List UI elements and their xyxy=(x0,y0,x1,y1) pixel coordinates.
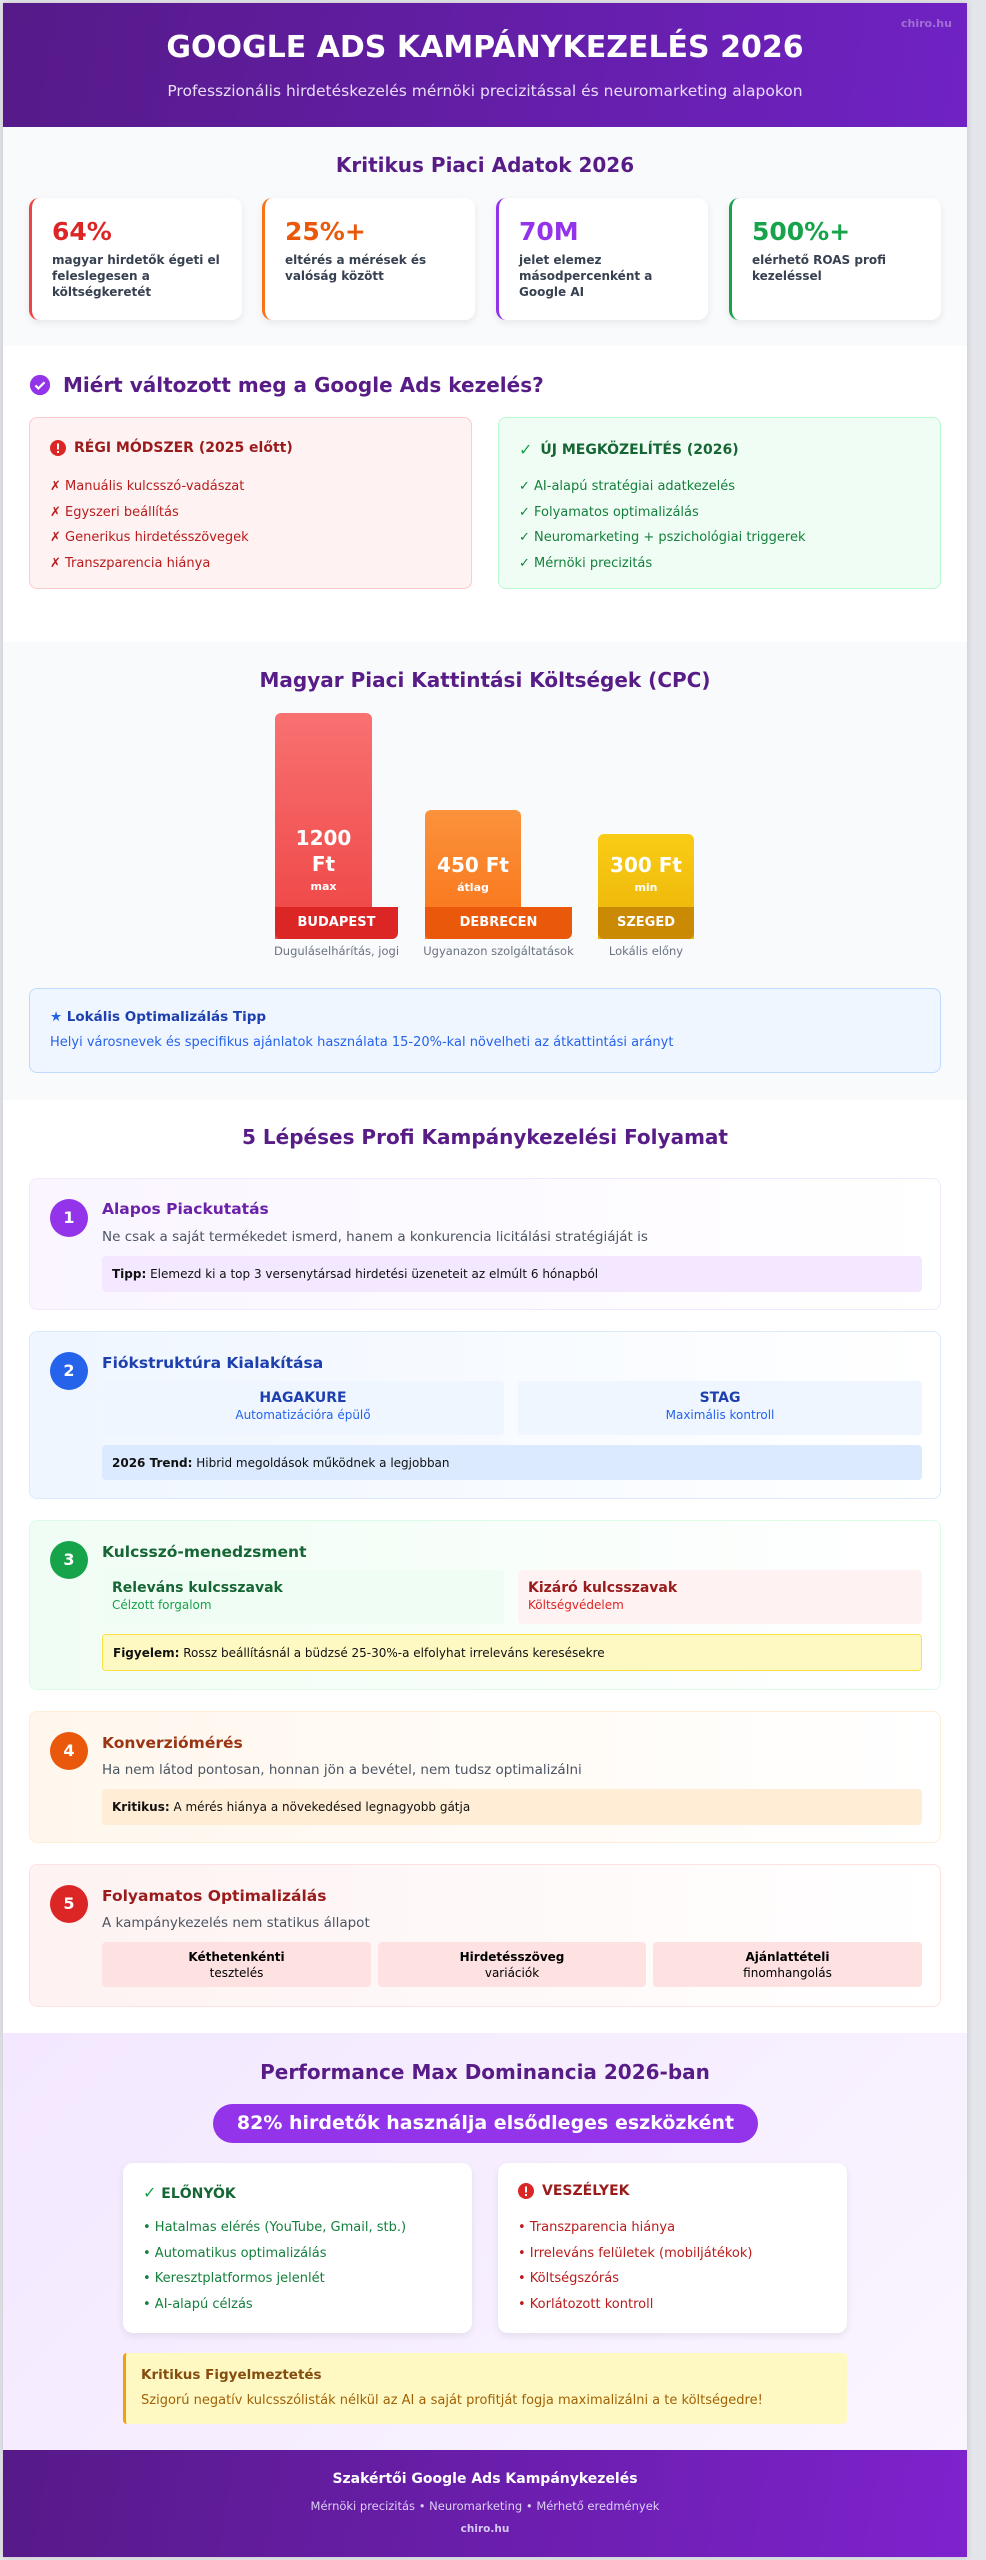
step 1: Elemezd ki a top 3 versenytársad hirdetési üzeneteit az elmúlt 6 hónapból xyxy=(150,1267,598,1281)
step 3: Célzott forgalom xyxy=(112,1598,212,1612)
bar: Debrecen xyxy=(425,810,521,939)
bar: Budapest xyxy=(275,713,372,939)
pill xyxy=(213,2104,758,2143)
step 1 xyxy=(29,1178,941,1310)
stat card 4: 500%+ xyxy=(752,217,850,246)
card: advantages: • AI-alapú célzás xyxy=(143,2297,253,2312)
step 3: Rossz beállításnál a büdzsé 25-30%-a elfolyhat irreleváns keresésekre xyxy=(183,1646,605,1660)
bar chart xyxy=(274,713,694,958)
step 3: Figyelem: xyxy=(113,1646,179,1660)
heading: Magyar Piaci Kattintási Költségek (CPC) xyxy=(260,668,710,692)
icon: check badge xyxy=(30,374,50,396)
footer xyxy=(3,2450,967,2557)
step 5: 5 xyxy=(63,1894,75,1913)
step 2: Automatizációra épülő xyxy=(235,1408,371,1422)
panel: old method xyxy=(29,417,472,589)
step 4: Ha nem látod pontosan, honnan jön a bevétel, nem tudsz optimalizálni xyxy=(102,1762,582,1778)
step 4: Kritikus: xyxy=(112,1800,170,1814)
bar chart: min xyxy=(634,881,658,894)
bar: Szeged xyxy=(598,834,694,939)
callout: local tip xyxy=(29,988,941,1073)
step 2: Fiókstruktúra Kialakítása xyxy=(102,1354,323,1372)
panel: new approach: ✓ AI-alapú stratégiai adatkezelés xyxy=(519,479,735,494)
bar chart: Ugyanazon szolgáltatások xyxy=(423,944,574,958)
card: dangers: • Korlátozott kontroll xyxy=(518,2297,653,2312)
panel: new approach: ✓ xyxy=(519,440,532,459)
panel: new approach: ✓ Mérnöki precizitás xyxy=(519,556,652,571)
panel: old method: ✗ Generikus hirdetésszövegek xyxy=(50,530,249,545)
panel: old method: ✗ Manuális kulcsszó-vadászat xyxy=(50,479,244,494)
title: GOOGLE ADS KAMPÁNYKEZELÉS 2026 xyxy=(166,30,804,65)
callout: critical warning: Szigorú negatív kulcsszólisták nélkül az AI a saját profitját fogja maximalizálni a te költségedre! xyxy=(141,2393,763,2408)
stat card 3: jelet elemez másodpercenként a Google AI xyxy=(519,253,652,299)
bar chart: 1200 xyxy=(296,826,351,850)
bar chart: átlag xyxy=(457,881,489,894)
stat card 3 xyxy=(496,198,708,320)
step 5: Ajánlattételi xyxy=(746,1950,829,1964)
card: dangers: VESZÉLYEK xyxy=(542,2183,630,2199)
step 3: 3 xyxy=(63,1550,75,1569)
footer: Szakértői Google Ads Kampánykezelés xyxy=(332,2471,638,2487)
callout: critical warning xyxy=(123,2353,847,2424)
heading: 5 steps: 5 Lépéses Profi Kampánykezelési Folyamat xyxy=(242,1125,728,1149)
stat card 1 xyxy=(29,198,242,320)
panel: new approach: ÚJ MEGKÖZELÍTÉS (2026) xyxy=(540,442,739,458)
stat card 4: elérhető ROAS profi kezeléssel xyxy=(752,253,886,283)
bar chart: Lokális előny xyxy=(609,944,683,958)
step 5: Hirdetésszöveg xyxy=(460,1950,564,1964)
stat card 1: magyar hirdetők égeti el feleslegesen a költségkeretét xyxy=(52,253,220,299)
pill: 82% hirdetők használja elsődleges eszközként xyxy=(237,2112,734,2134)
step 3: Költségvédelem xyxy=(528,1598,624,1612)
step 2: STAG xyxy=(700,1390,740,1406)
panel: stats xyxy=(3,127,967,346)
watermark: chiro.hu xyxy=(901,17,952,30)
header xyxy=(3,3,967,127)
stat card 2: eltérés a mérések és valóság között xyxy=(285,253,426,283)
step 2: Maximális kontroll xyxy=(666,1408,774,1422)
bar chart: Ft xyxy=(312,852,335,876)
panel: old method: ✗ Transzparencia hiánya xyxy=(50,556,210,571)
step 5: variációk xyxy=(485,1966,539,1980)
callout: local tip: ★ Lokális Optimalizálás Tipp xyxy=(50,1009,266,1025)
bar chart: 300 Ft xyxy=(610,853,682,877)
panel: old method: RÉGI MÓDSZER (2025 előtt) xyxy=(74,440,293,456)
step 4: A mérés hiánya a növekedésed legnagyobb gátja xyxy=(173,1800,470,1814)
step 3: Kulcsszó-menedzsment xyxy=(102,1543,306,1561)
stat card 3: 70M xyxy=(519,217,579,246)
callout: critical warning: Kritikus Figyelmeztetés xyxy=(141,2367,322,2383)
card: dangers: • Költségszórás xyxy=(518,2271,619,2286)
step 2: 2026 Trend: xyxy=(112,1456,192,1470)
step 2: HAGAKURE xyxy=(259,1390,347,1406)
step 4: 4 xyxy=(63,1741,75,1760)
callout: local tip: Helyi városnevek és specifikus ajánlatok használata 15-20%-kal növelheti az átkattintási arányt xyxy=(50,1035,673,1050)
step 5: Kéthetenkénti xyxy=(188,1950,285,1964)
subtitle: Professzionális hirdetéskezelés mérnöki precizitással és neuromarketing alapokon xyxy=(167,82,803,100)
panel: new approach xyxy=(498,417,941,589)
card: advantages: • Hatalmas elérés (YouTube, Gmail, stb.) xyxy=(143,2220,406,2235)
heading: Performance Max Dominancia 2026-ban xyxy=(260,2060,710,2084)
step 1: Tipp: xyxy=(112,1267,146,1281)
step 2: 2 xyxy=(63,1361,75,1380)
step 2: Hibrid megoldások működnek a legjobban xyxy=(196,1456,450,1470)
step 1: 1 xyxy=(63,1208,75,1227)
step 5: finomhangolás xyxy=(743,1966,832,1980)
card: advantages: • Automatikus optimalizálás xyxy=(143,2246,327,2261)
stat card 4 xyxy=(729,198,941,320)
panel: new approach: ✓ Folyamatos optimalizálás xyxy=(519,505,699,520)
card: advantages xyxy=(123,2163,472,2333)
step 1: Ne csak a saját termékedet ismerd, hanem a konkurencia licitálási stratégiáját is xyxy=(102,1229,648,1245)
panel: new approach: ✓ Neuromarketing + pszichológiai triggerek xyxy=(519,530,805,545)
panel: CPC xyxy=(3,642,967,1100)
heading: why changed: Miért változott meg a Google Ads kezelés? xyxy=(63,373,544,397)
step 1: Alapos Piackutatás xyxy=(102,1200,269,1218)
stat card 2 xyxy=(262,198,475,320)
step 4 xyxy=(29,1711,941,1843)
bar chart: max xyxy=(310,880,336,893)
panel: performance max xyxy=(3,2033,967,2450)
bar chart: SZEGED xyxy=(617,915,675,930)
card: advantages: ✓ ELŐNYÖK xyxy=(143,2183,236,2202)
card: dangers: • Transzparencia hiánya xyxy=(518,2220,675,2235)
bar chart: BUDAPEST xyxy=(298,915,375,930)
step 3: Releváns kulcsszavak xyxy=(112,1580,283,1596)
step 3 xyxy=(29,1520,941,1690)
bar chart: Duguláselhárítás, jogi xyxy=(274,944,399,958)
step 5: A kampánykezelés nem statikus állapot xyxy=(102,1915,370,1931)
card: dangers xyxy=(498,2163,847,2333)
heading: Kritikus Piaci Adatok 2026 xyxy=(336,153,634,177)
footer: Mérnöki precizitás • Neuromarketing • Mérhető eredmények xyxy=(311,2499,659,2513)
step 5 xyxy=(29,1864,941,2007)
step 3: Kizáró kulcsszavak xyxy=(528,1580,677,1596)
step 5: Folyamatos Optimalizálás xyxy=(102,1887,326,1905)
card: dangers: • Irreleváns felületek (mobiljátékok) xyxy=(518,2246,752,2261)
stat card 1: 64% xyxy=(52,217,112,246)
bar chart: 450 Ft xyxy=(437,853,509,877)
stat card 2: 25%+ xyxy=(285,217,366,246)
panel: old method: ✗ Egyszeri beállítás xyxy=(50,505,179,520)
footer: chiro.hu xyxy=(461,2523,509,2535)
step 5: tesztelés xyxy=(210,1966,263,1980)
step 4: Konverziómérés xyxy=(102,1734,243,1752)
card: advantages: • Keresztplatformos jelenlét xyxy=(143,2271,325,2286)
step 2 xyxy=(29,1331,941,1499)
bar chart: DEBRECEN xyxy=(460,915,537,930)
